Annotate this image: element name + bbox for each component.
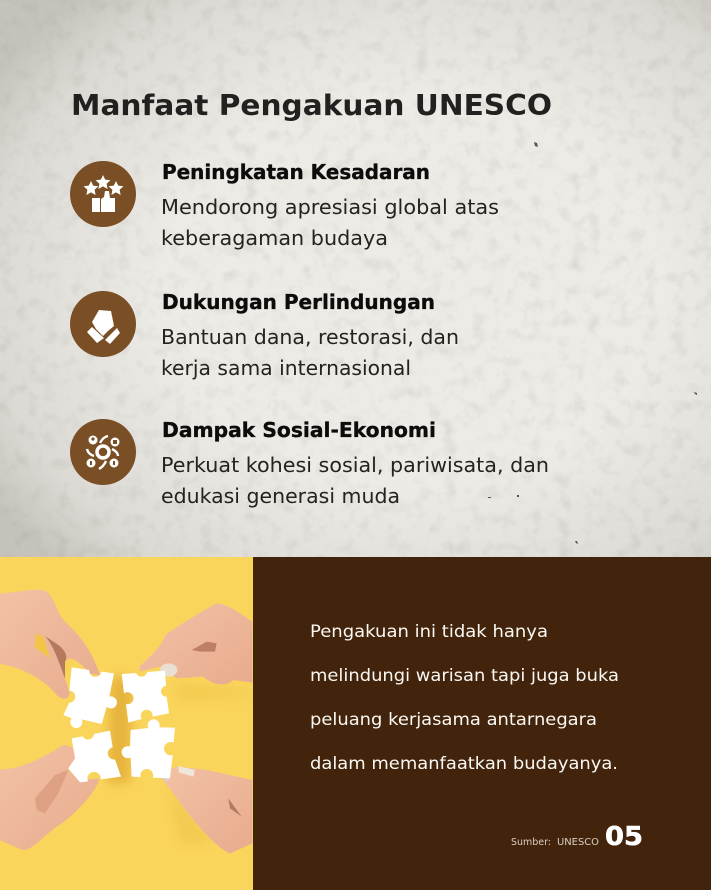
nails	[160, 663, 177, 677]
panel: closing message	[253, 557, 711, 890]
description: keberagaman budaya	[161, 226, 388, 250]
closing text: melindungi warisan tapi juga buka	[310, 666, 619, 686]
description	[161, 325, 459, 380]
hand and puzzle shadows	[33, 633, 252, 843]
page number: 05	[605, 822, 643, 852]
description: kerja sama internasional	[161, 356, 411, 380]
hand top left	[0, 590, 100, 699]
closing text: dalam memanfaatkan budayanya.	[310, 754, 618, 774]
benefit 3: socio-economic impact	[70, 418, 549, 508]
description: Perkuat kohesi sosial, pariwisata, dan	[161, 453, 549, 477]
description	[161, 453, 549, 508]
source: Sumber:	[511, 837, 551, 848]
icon: gear with surrounding symbols	[70, 419, 136, 485]
benefit 1: awareness	[70, 160, 499, 250]
hand top right	[139, 603, 252, 684]
description: Bantuan dana, restorasi, dan	[161, 325, 459, 349]
closing text: Pengakuan ini tidak hanya	[310, 622, 548, 642]
hand bottom left	[0, 745, 99, 850]
description: edukasi generasi muda	[161, 484, 400, 508]
description	[161, 195, 499, 250]
textured paper background	[0, 0, 711, 558]
heading: Dukungan Perlindungan	[162, 290, 435, 314]
hand bottom right	[160, 767, 252, 853]
heading: Dampak Sosial-Ekonomi	[162, 418, 436, 442]
closing text: peluang kerjasama antarnegara	[310, 710, 597, 730]
description: Mendorong apresiasi global atas	[161, 195, 499, 219]
puzzle piece top right	[122, 671, 169, 723]
source: UNESCO	[557, 837, 599, 848]
puzzle piece bottom left	[68, 731, 121, 782]
puzzle piece top left	[63, 667, 117, 728]
heading: Peningkatan Kesadaran	[162, 160, 430, 184]
photo panel: hands joining puzzle pieces	[0, 557, 253, 890]
title: Manfaat Pengakuan UNESCO	[71, 89, 552, 122]
closing text	[310, 622, 619, 774]
icon: clasped fist	[70, 291, 136, 357]
icon: stars and thumbs up	[70, 161, 136, 227]
source	[511, 837, 599, 848]
puzzle piece bottom right	[122, 719, 175, 778]
benefit 2: protection support	[70, 290, 459, 380]
